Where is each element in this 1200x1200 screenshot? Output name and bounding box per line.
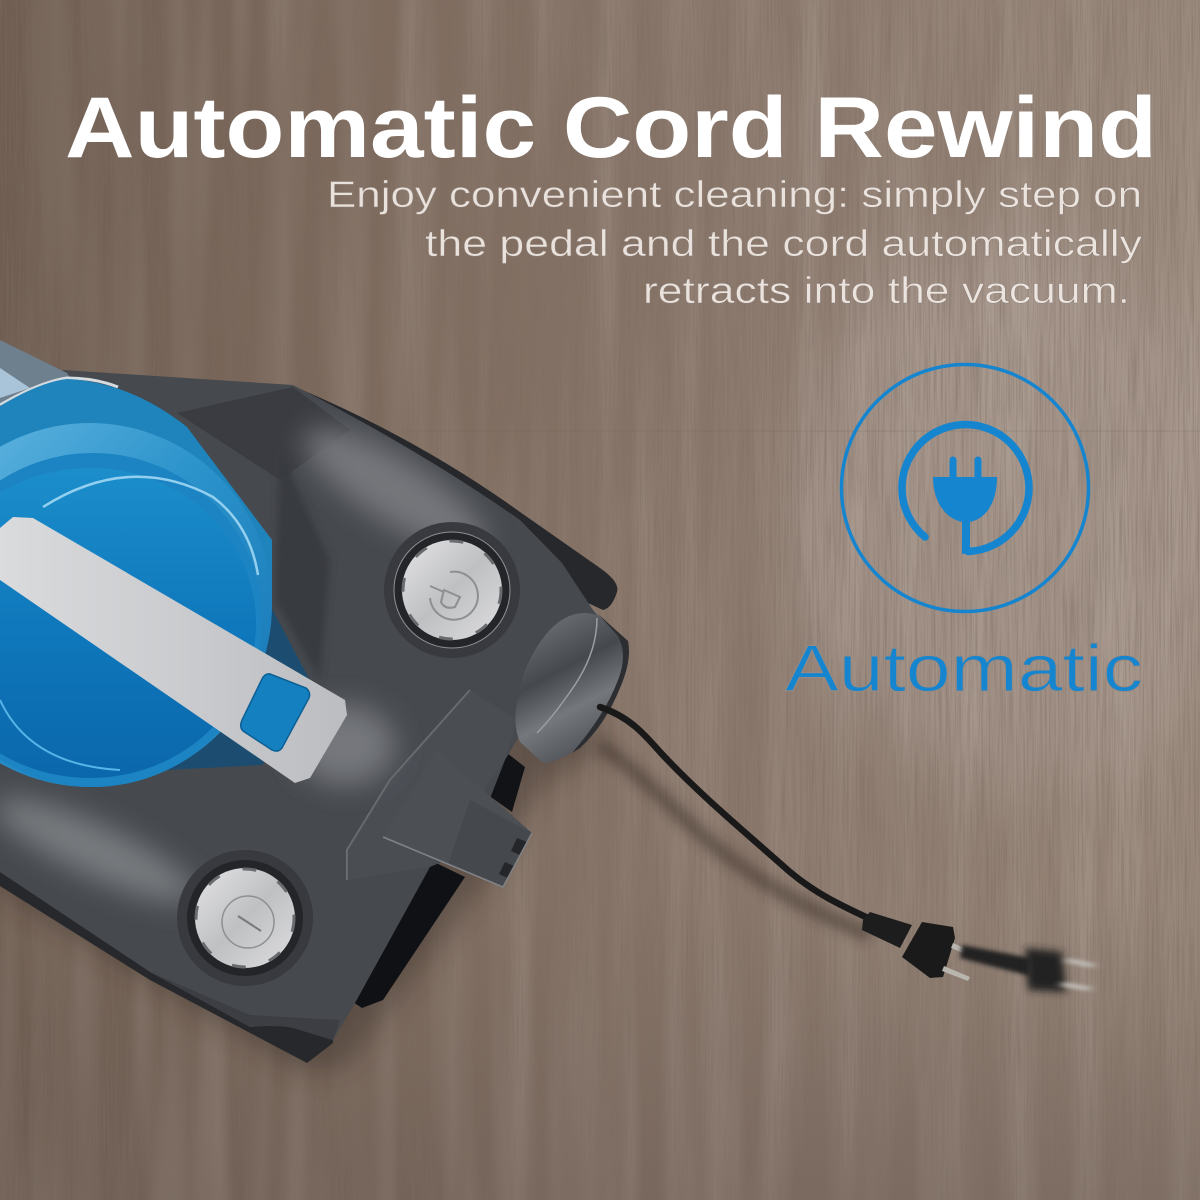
silver handle xyxy=(0,517,347,783)
cord rewind button xyxy=(384,522,520,658)
description text: the pedal and the cord automatically xyxy=(425,223,1143,264)
black lower rim xyxy=(0,868,333,1063)
icon: plug in circle xyxy=(842,364,1088,612)
black rear rim xyxy=(300,389,617,610)
description text: Enjoy convenient cleaning: simply step on xyxy=(327,174,1142,215)
plug strain relief xyxy=(862,912,912,948)
vacuum drop shadow xyxy=(0,700,610,1070)
title: Automatic Cord Rewind xyxy=(65,80,1157,176)
description text xyxy=(327,174,1143,311)
blurred moving plug xyxy=(960,945,1094,992)
clear dust bin xyxy=(0,340,118,405)
plug prongs xyxy=(942,943,980,981)
black side insert xyxy=(350,860,465,1008)
plug head xyxy=(902,922,955,978)
power button xyxy=(177,850,313,986)
main grey body xyxy=(0,370,620,1040)
blue release button xyxy=(241,674,310,751)
cord latch xyxy=(383,750,532,887)
vacuum cord shadow xyxy=(600,745,870,935)
body highlights and shadows xyxy=(0,387,517,1040)
power cord xyxy=(600,707,1094,992)
exhaust cylinder xyxy=(515,613,629,763)
vacuum cleaner xyxy=(0,340,629,1070)
blue lid disc xyxy=(0,423,272,787)
automatic label: Automatic xyxy=(785,631,1143,705)
inner blue chamber xyxy=(166,590,315,770)
description text: retracts into the vacuum. xyxy=(643,270,1130,311)
ribbed blue bin xyxy=(0,379,272,620)
